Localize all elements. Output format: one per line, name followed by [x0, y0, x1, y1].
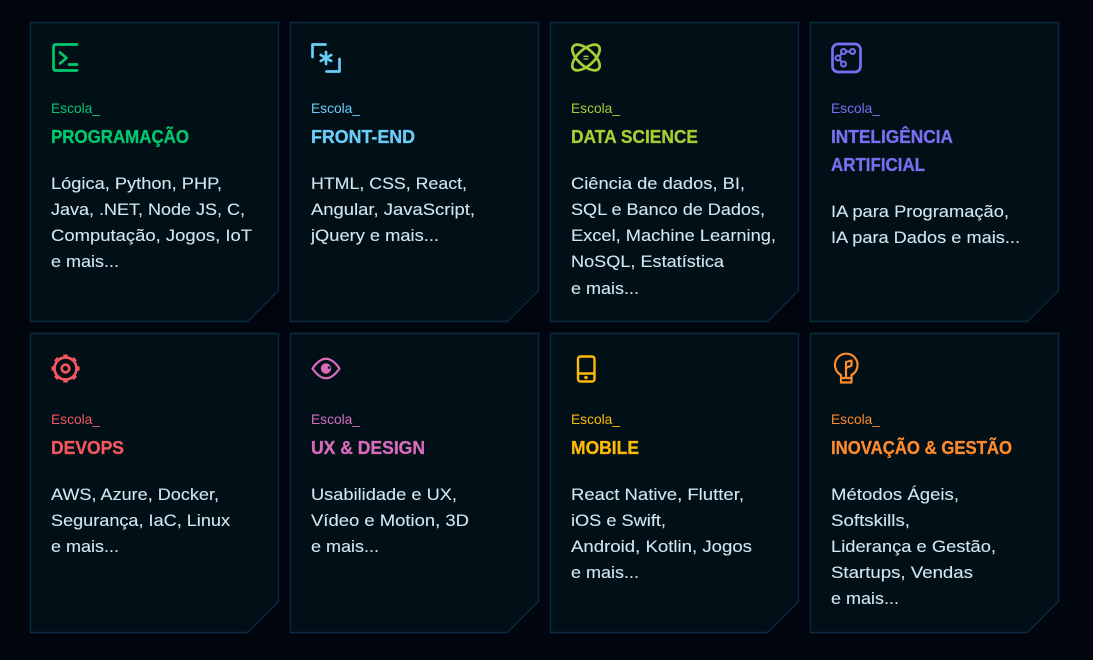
- text: topics: e mais...: [51, 537, 119, 556]
- text: topics: Métodos Ágeis,: [831, 485, 959, 504]
- text: topics: e mais...: [51, 252, 119, 271]
- text: topics: Segurança, IaC, Linux: [51, 511, 231, 530]
- heading: Programação: PROGRAMAÇÃO: [51, 126, 189, 147]
- text: topics: [831, 485, 996, 608]
- label: Escola: Escola_: [831, 411, 880, 427]
- text: topics: Usabilidade e UX,: [311, 485, 457, 504]
- label: Escola: Escola_: [571, 411, 620, 427]
- icon: terminal: [54, 44, 77, 70]
- icon: node network: [832, 44, 860, 72]
- heading: DevOps: DEVOPS: [51, 438, 124, 458]
- icon: code asterisk: [312, 44, 340, 72]
- text: topics: Android, Kotlin, Jogos: [571, 537, 752, 556]
- text: topics: e mais...: [571, 279, 639, 298]
- heading: UX & Design: UX & DESIGN: [311, 438, 425, 458]
- heading: Inteligência Artificial: ARTIFICIAL: [831, 155, 925, 175]
- panel: Inteligência Artificial: [810, 22, 1058, 322]
- text: topics: [571, 174, 776, 298]
- text: topics: Computação, Jogos, IoT: [51, 226, 252, 245]
- text: topics: NoSQL, Estatística: [571, 252, 725, 271]
- panel: Front-end: [290, 22, 538, 322]
- panel: UX & Design: [290, 334, 538, 632]
- label: Escola: Escola_: [311, 100, 360, 116]
- text: topics: e mais...: [831, 589, 899, 608]
- text: topics: Lógica, Python, PHP,: [51, 174, 222, 193]
- panel: Programação: [30, 22, 278, 322]
- panel: Data Science: [550, 22, 798, 322]
- text: topics: Startups, Vendas: [831, 563, 973, 582]
- text: topics: [571, 485, 752, 582]
- text: topics: [311, 485, 469, 556]
- heading: Inteligência Artificial: [831, 126, 953, 175]
- text: topics: e mais...: [311, 537, 379, 556]
- heading: Data Science: DATA SCIENCE: [571, 127, 698, 147]
- label: Escola: Escola_: [311, 411, 360, 427]
- text: topics: [831, 202, 1020, 247]
- label: Escola: Escola_: [831, 100, 880, 116]
- text: topics: jQuery e mais...: [310, 226, 439, 245]
- text: topics: IA para Programação,: [831, 202, 1009, 221]
- panel: Inovação & Gestão: [810, 334, 1058, 632]
- text: topics: e mais...: [571, 563, 639, 582]
- text: topics: React Native, Flutter,: [571, 485, 744, 504]
- text: topics: HTML, CSS, React,: [311, 174, 467, 193]
- heading: Mobile: MOBILE: [571, 438, 639, 458]
- icon: atom: [568, 40, 604, 75]
- text: topics: [51, 174, 252, 271]
- text: topics: AWS, Azure, Docker,: [51, 485, 219, 504]
- icon: light bulb: [835, 354, 858, 382]
- icon: eye: [312, 359, 340, 378]
- text: topics: Excel, Machine Learning,: [571, 226, 776, 245]
- label: Escola: Escola_: [51, 100, 100, 116]
- label: Escola: Escola_: [51, 411, 100, 427]
- heading: Inteligência Artificial: INTELIGÊNCIA: [831, 126, 953, 147]
- icon: gear: [52, 354, 80, 382]
- text: topics: [51, 485, 231, 556]
- heading: Inovação & Gestão: INOVAÇÃO & GESTÃO: [831, 437, 1012, 458]
- text: topics: Softskills,: [831, 511, 910, 530]
- panel: DevOps: [30, 334, 278, 632]
- icon: phone: [578, 356, 594, 382]
- heading: Front-end: FRONT-END: [311, 127, 415, 147]
- text: topics: SQL e Banco de Dados,: [571, 200, 765, 219]
- text: topics: [310, 174, 475, 245]
- text: topics: Ciência de dados, BI,: [571, 174, 745, 193]
- text: topics: Angular, JavaScript,: [311, 200, 475, 219]
- panel: Mobile: [550, 334, 798, 632]
- label: Escola: Escola_: [571, 100, 620, 116]
- text: topics: Liderança e Gestão,: [831, 537, 996, 556]
- text: topics: Java, .NET, Node JS, C,: [51, 200, 245, 219]
- text: topics: IA para Dados e mais...: [831, 228, 1020, 247]
- text: topics: iOS e Swift,: [571, 511, 666, 530]
- text: topics: Vídeo e Motion, 3D: [311, 511, 469, 530]
